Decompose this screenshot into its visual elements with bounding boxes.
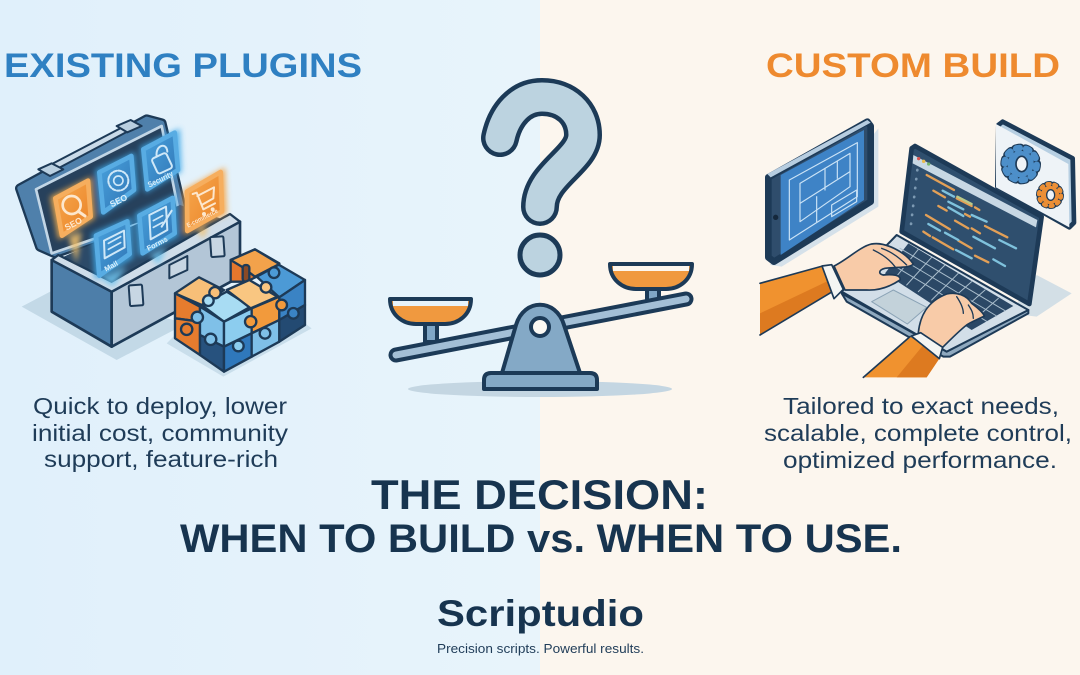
text block: custom build benefits: scalable, complete control, <box>764 420 1072 446</box>
text block: plugin benefits: Quick to deploy, lower <box>33 393 287 419</box>
card: blue gear <box>99 156 134 212</box>
icon: question mark <box>500 97 583 275</box>
left arm and hand <box>760 244 913 335</box>
fulcrum <box>484 305 597 389</box>
brand logo wordmark: Scriptudio <box>437 593 644 634</box>
card: blue mail: Mail <box>103 259 120 273</box>
title: THE DECISION: <box>371 471 708 518</box>
orange gear <box>1039 184 1061 206</box>
card: blue forms <box>139 198 175 253</box>
text block: plugin benefits <box>32 393 289 472</box>
toolbox lid <box>20 119 182 253</box>
heading: existing plugins: EXISTING PLUGINS <box>4 47 362 85</box>
icon: balance scale <box>390 264 692 397</box>
back orange piece <box>231 249 279 282</box>
card: blue forms: Forms <box>145 235 169 253</box>
tablet <box>767 120 878 267</box>
text block: custom build benefits: Tailored to exact needs, <box>783 393 1059 419</box>
toolbox body <box>52 205 240 347</box>
code lines <box>911 170 1016 266</box>
card: blue lock <box>143 133 178 189</box>
text block: custom build benefits <box>764 393 1072 473</box>
laptop <box>842 146 1072 357</box>
scale shadow <box>408 381 672 397</box>
gear card <box>996 122 1074 227</box>
text block: custom build benefits: optimized performance. <box>783 447 1057 473</box>
left pan <box>390 299 471 342</box>
title <box>180 471 902 561</box>
card: blue gear: SEO <box>108 192 129 209</box>
right pan <box>610 264 692 301</box>
cube shadow <box>167 323 312 377</box>
card: orange cart <box>186 172 222 231</box>
card: orange cart: E-commerce <box>186 208 220 229</box>
heading: custom build: CUSTOM BUILD <box>766 47 1060 85</box>
icon: laptop with blueprint tablet and gears <box>760 120 1074 377</box>
puzzle cube <box>175 249 305 372</box>
card: orange search <box>55 181 91 236</box>
text block: plugin benefits: initial cost, community <box>32 420 289 446</box>
card glows <box>50 128 227 287</box>
icon: open toolbox with plugin cards and puzzle cube <box>20 119 312 377</box>
blue gear <box>1005 148 1037 180</box>
title: WHEN TO BUILD vs. WHEN TO USE. <box>180 517 902 561</box>
beam <box>396 299 686 355</box>
panel: left background <box>0 0 540 675</box>
card: orange search: SEO <box>63 215 84 232</box>
toolbox shadow <box>22 290 187 360</box>
card: blue lock: Security <box>146 169 175 189</box>
panel: right background <box>540 0 1080 675</box>
card: blue mail <box>96 221 130 276</box>
right arm and hand <box>863 293 984 377</box>
brand tagline: Precision scripts. Powerful results. <box>437 641 644 656</box>
text block: plugin benefits: support, feature-rich <box>44 446 278 472</box>
